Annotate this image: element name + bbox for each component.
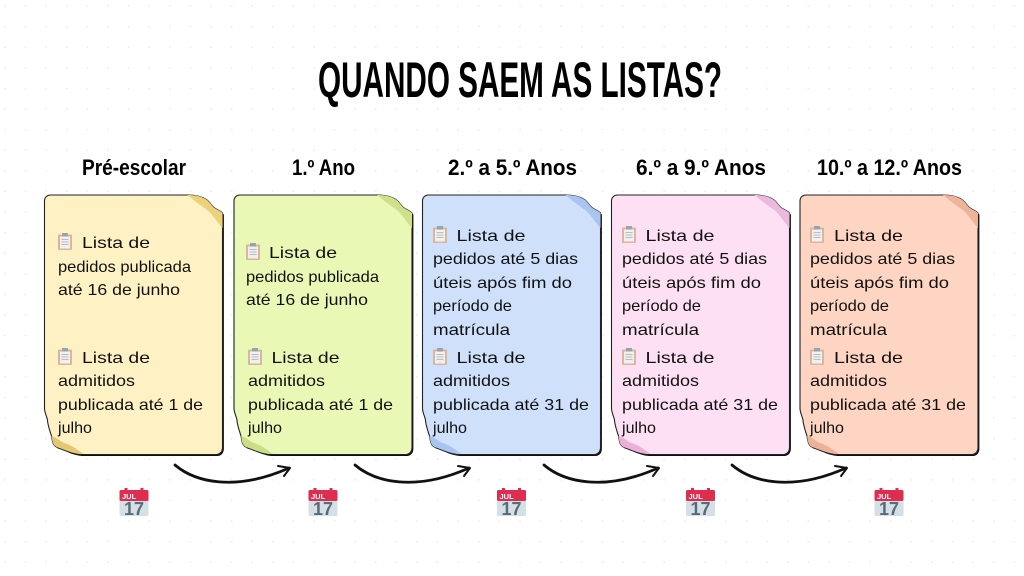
icon: calendar 2: 17 — [313, 499, 333, 519]
text: lista de admitidos: Lista de — [82, 350, 150, 367]
icon: calendar 1: JUL — [122, 492, 137, 501]
text: lista de pedidos: pedidos publicada — [246, 269, 379, 286]
icon: calendar 4: JUL — [688, 492, 703, 501]
text: lista de pedidos — [58, 235, 191, 299]
text: lista de pedidos: Lista de — [834, 228, 903, 245]
text: lista de admitidos — [57, 350, 203, 437]
arrow 4 — [732, 465, 847, 482]
text: lista de admitidos: publicada até 1 de — [248, 397, 393, 414]
text: lista de pedidos: úteis após fim do — [622, 275, 761, 292]
icon: clipboard — [433, 226, 447, 243]
icon: clipboard — [810, 226, 824, 243]
icon: calendar 5: JUL — [877, 492, 892, 501]
text: lista de pedidos: úteis após fim do — [433, 275, 572, 292]
panel: 2.º a 5.º Anos card — [422, 195, 602, 456]
text: lista de pedidos: até 16 de junho — [246, 292, 368, 309]
text: lista de admitidos — [621, 350, 778, 437]
column heading: 1.º Ano: 1.º Ano — [292, 155, 355, 180]
text: lista de pedidos: pedidos até 5 dias — [810, 251, 955, 268]
arrow 2 — [355, 465, 470, 482]
text: lista de admitidos: julho — [247, 420, 282, 437]
icon: calendar 1 — [120, 488, 148, 519]
text: lista de admitidos — [247, 350, 393, 437]
text: lista de pedidos — [622, 228, 767, 339]
text: lista de admitidos: publicada até 31 de — [433, 397, 589, 414]
text: lista de pedidos: pedidos publicada — [58, 259, 191, 276]
icon: calendar 5 — [874, 488, 904, 519]
text: lista de pedidos: até 16 de junho — [58, 282, 180, 299]
text: lista de pedidos: úteis após fim do — [810, 275, 949, 292]
icon: calendar 2 — [308, 488, 338, 519]
icon: calendar 3 — [497, 488, 526, 519]
text: lista de admitidos: admitidos — [58, 373, 135, 390]
panel: 6.º a 9.º Anos card — [612, 195, 791, 456]
icon: clipboard — [248, 348, 262, 365]
column heading: 2.º a 5.º Anos: 2.º a 5.º Anos — [448, 155, 577, 180]
text: lista de admitidos: julho — [432, 420, 467, 437]
text: lista de pedidos: pedidos até 5 dias — [622, 251, 767, 268]
icon: clipboard — [433, 348, 447, 365]
text: lista de admitidos: admitidos — [810, 373, 887, 390]
text: lista de admitidos: Lista de — [272, 350, 340, 367]
text: lista de admitidos: julho — [621, 420, 656, 437]
text: lista de admitidos: admitidos — [433, 373, 510, 390]
text: lista de admitidos — [809, 350, 966, 437]
text: lista de admitidos: publicada até 31 de — [622, 397, 778, 414]
text: lista de pedidos — [810, 228, 955, 339]
text: lista de pedidos: Lista de — [646, 228, 715, 245]
text: lista de pedidos: Lista de — [269, 245, 337, 262]
column heading: Pré-escolar: Pré-escolar — [82, 155, 186, 180]
text: lista de pedidos: Lista de — [82, 235, 150, 252]
text: lista de admitidos: admitidos — [622, 373, 699, 390]
icon: clipboard — [622, 226, 636, 243]
icon: calendar 3: JUL — [500, 492, 514, 501]
icon: clipboard — [246, 243, 260, 260]
text: lista de pedidos: Lista de — [456, 228, 526, 245]
text: lista de pedidos: matrícula — [810, 322, 887, 339]
icon: calendar 4: 17 — [690, 499, 711, 519]
panel: 10.º a 12.º Anos card — [800, 195, 979, 456]
text: lista de admitidos: Lista de — [834, 350, 903, 367]
text: lista de admitidos: publicada até 1 de — [58, 397, 203, 414]
icon: clipboard — [58, 233, 72, 250]
text: lista de pedidos: período de — [433, 298, 512, 315]
column heading: 6.º a 9.º Anos: 6.º a 9.º Anos — [636, 155, 766, 180]
text: lista de pedidos: período de — [622, 298, 701, 315]
title: QUANDO SAEM AS LISTAS? — [318, 52, 722, 108]
icon: clipboard — [58, 348, 72, 365]
text: lista de pedidos: matrícula — [622, 322, 699, 339]
column heading: 10.º a 12.º Anos: 10.º a 12.º Anos — [817, 155, 962, 180]
panel: 1.º Ano card — [234, 195, 413, 456]
icon: calendar 4 — [686, 488, 715, 519]
text: lista de admitidos — [432, 350, 589, 437]
panel: Pré-escolar card — [44, 195, 224, 456]
icon: calendar 5: 17 — [879, 499, 899, 519]
icon: calendar 3: 17 — [501, 499, 522, 519]
arrow 1 — [175, 465, 290, 482]
icon: calendar 1: 17 — [124, 499, 144, 519]
text: lista de admitidos: Lista de — [456, 350, 526, 367]
text: lista de admitidos: julho — [57, 420, 92, 437]
text: lista de admitidos: admitidos — [248, 373, 325, 390]
icon: clipboard — [622, 348, 636, 365]
text: lista de admitidos: publicada até 31 de — [810, 397, 966, 414]
text: lista de pedidos — [246, 245, 379, 309]
text: lista de pedidos: pedidos até 5 dias — [433, 251, 578, 268]
icon: clipboard — [810, 348, 824, 365]
text: lista de pedidos: período de — [810, 298, 889, 315]
text: lista de pedidos: matrícula — [433, 322, 510, 339]
text: lista de admitidos: Lista de — [646, 350, 715, 367]
text: lista de admitidos: julho — [809, 420, 844, 437]
text: lista de pedidos — [433, 228, 578, 339]
icon: calendar 2: JUL — [311, 492, 326, 501]
arrow 3 — [544, 465, 659, 482]
